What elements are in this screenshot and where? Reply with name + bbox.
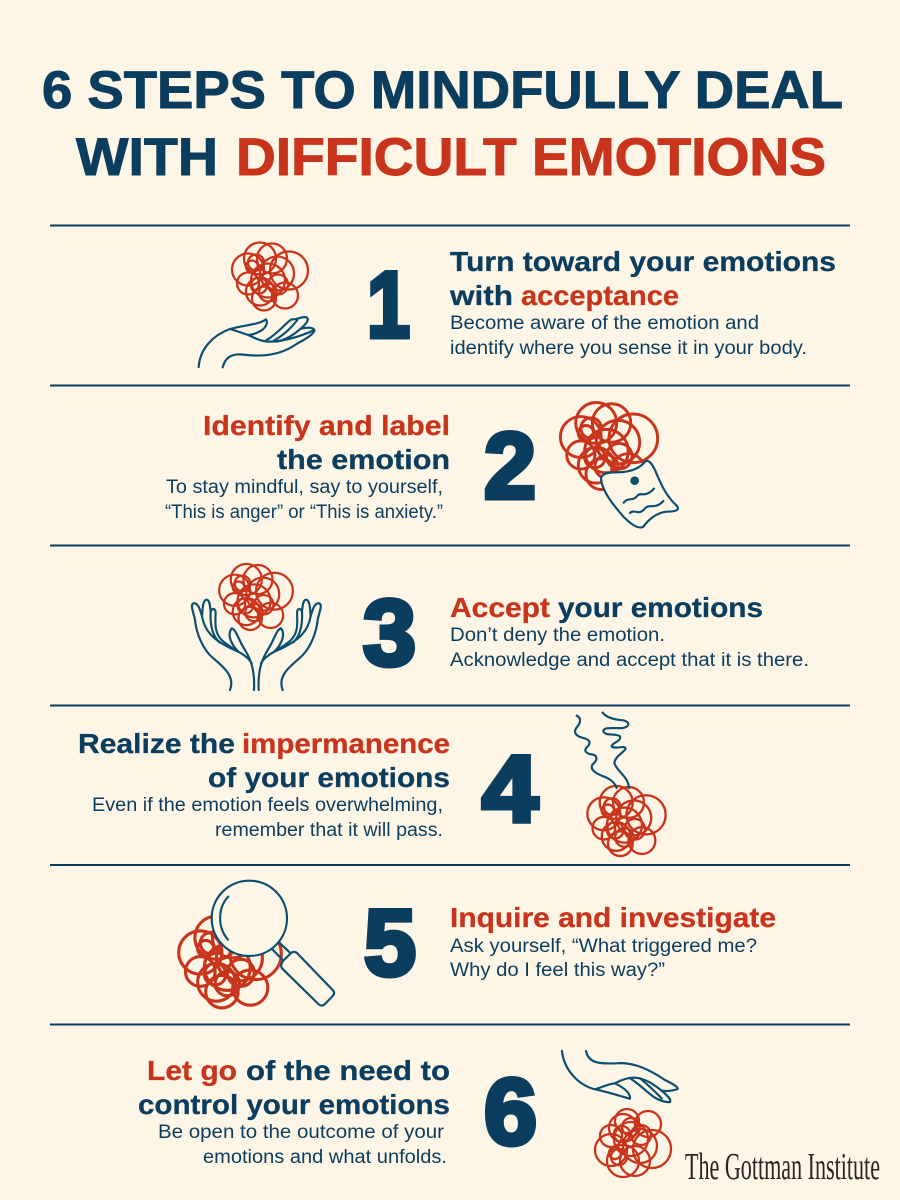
step 1 text: acceptance [521,280,679,311]
step 2 text: the emotion [277,444,450,475]
icon: magnifying glass over knot [179,881,334,1008]
step 6 text: Be open to the outcome of your [158,1122,445,1143]
step 3 text: Acknowledge and accept that it is there. [450,650,809,671]
step 1 text: identify where you sense it in your body. [450,338,807,359]
step 6 text [138,1055,450,1168]
step 1 text: Turn toward your emotions [450,246,836,277]
step 5 text: Inquire and investigate [450,902,776,933]
step 1 text [449,246,836,359]
step 4 text: remember that it will pass. [215,820,443,841]
step 3 text: Don’t deny the emotion. [450,625,665,646]
icon: knot with rising smoke [575,713,666,856]
step 6 text: emotions and what unfolds. [203,1147,447,1168]
step 2 text [165,410,450,523]
step 5 number: 5 [364,890,416,995]
icon: knot above open hand [199,242,314,367]
step 3 text: Accept [450,592,550,623]
step 4 text: of your emotions [208,762,450,793]
icon: knot above two hands [192,564,321,690]
step 1 number: 1 [367,252,410,357]
step 6 text: control your emotions [138,1089,450,1120]
icon: hand releasing knot [562,1051,678,1177]
step 2 text: “This is anger” or “This is anxiety.” [165,502,443,523]
title: DIFFICULT EMOTIONS [236,128,826,187]
step 1 text: Become aware of the emotion and [450,313,759,334]
step 4 text: Even if the emotion feels overwhelming, [92,795,443,816]
step 2 text: To stay mindful, say to yourself, [166,477,443,498]
step 3 number: 3 [363,580,416,685]
title: 6 STEPS TO MINDFULLY DEAL [42,61,843,120]
step 4 text: Realize the [78,728,235,759]
step 3 text [450,592,809,671]
step 4 text [78,728,450,841]
title: WITH [76,128,218,187]
step 5 text [450,902,776,981]
step 2 number: 2 [484,413,536,518]
step 6 number: 6 [484,1059,537,1164]
title [42,61,843,187]
step 3 text: your emotions [558,592,763,623]
step 4 text: impermanence [242,728,450,759]
step 1 text: with [449,280,513,311]
step 4 number: 4 [482,736,538,841]
step 6 text: Let go [147,1055,237,1086]
step 5 text: Why do I feel this way?” [450,960,665,981]
icon: knot with note [560,402,678,528]
step 2 text: Identify and label [203,410,450,441]
step 6 text: of the need to [246,1055,450,1086]
step 5 text: Ask yourself, “What triggered me? [450,936,757,957]
